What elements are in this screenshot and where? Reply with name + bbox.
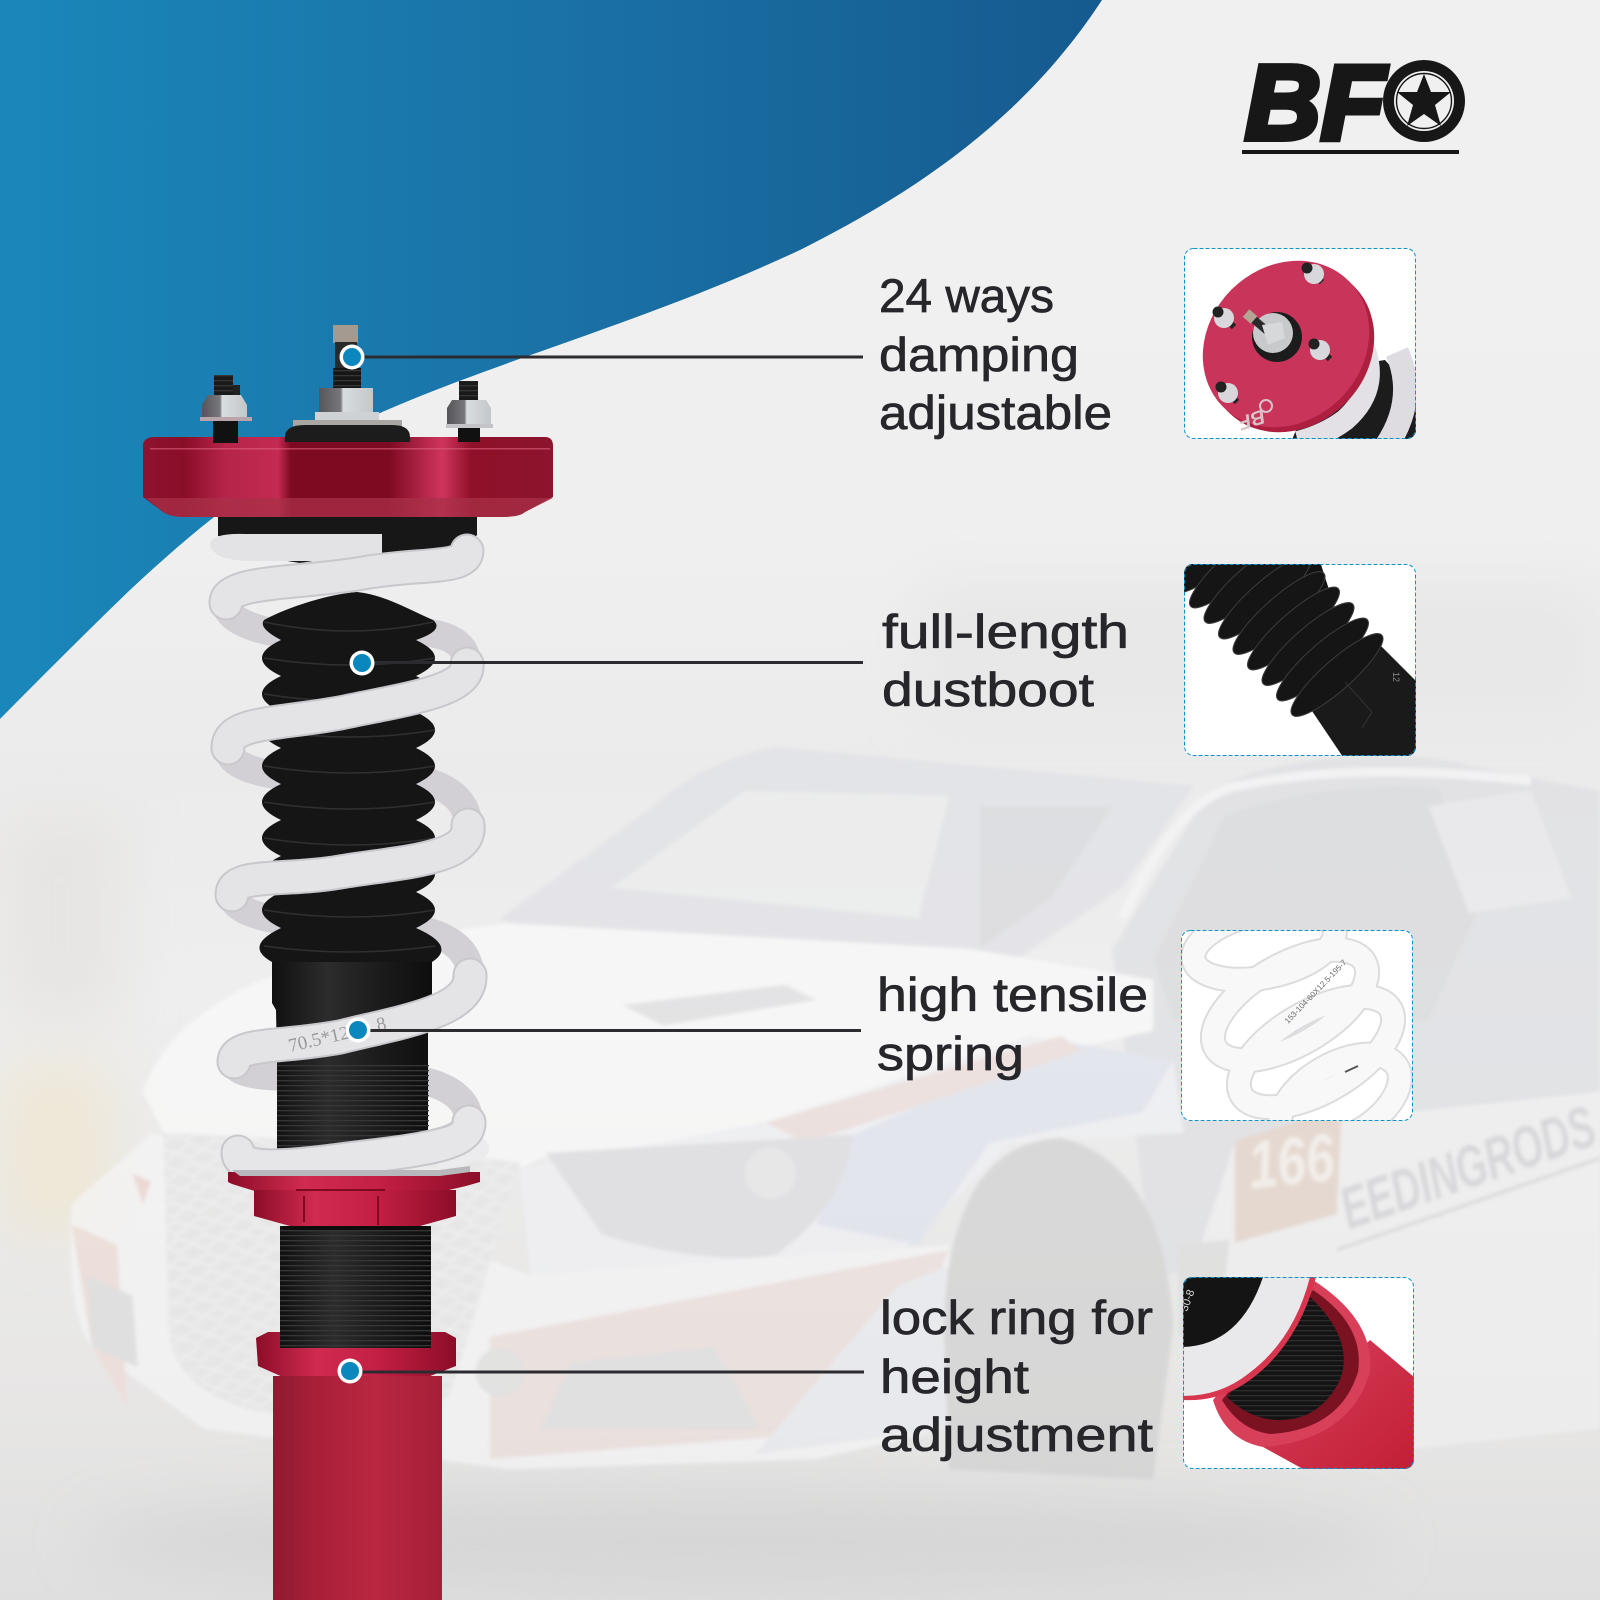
photo card: dustboot: 12 (1391, 672, 1401, 682)
red tube (273, 1376, 442, 1600)
label: full-length dustboot (882, 605, 1129, 716)
spring behind the mount (1292, 344, 1416, 439)
rear spring coils (226, 603, 470, 1122)
number panel (1235, 1107, 1342, 1243)
headlight (546, 1135, 852, 1258)
photo card: spring: 153-104-60X12.5-195-7 (1283, 958, 1349, 1025)
windshield (500, 747, 1194, 964)
label: 24 ways damping adjustable: damping (879, 328, 1079, 381)
blue and red stripes (520, 1036, 1184, 1276)
hood (143, 923, 1153, 1168)
background: faded race car photo: 166 (1245, 1120, 1338, 1204)
top plate (143, 437, 553, 517)
photo card: dustboot (1184, 564, 1416, 756)
label: lock ring for height adjustment: adjustment (880, 1408, 1153, 1461)
left mounting bolt (200, 375, 252, 443)
photo card: lock ring (1179, 1277, 1414, 1469)
coilover shock absorber: 8 (374, 1013, 388, 1036)
label: full-length dustboot: full-length (882, 605, 1129, 658)
label: high tensile spring (877, 968, 1148, 1080)
leader line: dustboot (362, 661, 863, 664)
label: 24 ways damping adjustable (879, 269, 1112, 439)
top flat coil (210, 534, 382, 561)
dust boot (259, 592, 441, 962)
label: lock ring for height adjustment: height (880, 1350, 1029, 1403)
black body and threads (272, 958, 432, 1150)
center stud (1252, 312, 1302, 362)
upper black seat (218, 517, 477, 565)
photo card: lock ring: 30-8 (1179, 1288, 1197, 1313)
label: high tensile spring: high tensile (877, 968, 1148, 1021)
label: lock ring for height adjustment: lock ring for (880, 1291, 1153, 1344)
bumper (71, 1133, 949, 1469)
spring perch (228, 1172, 480, 1192)
lock nut (254, 1190, 456, 1226)
label: lock ring for height adjustment (880, 1291, 1153, 1461)
logo: BFO: BF (1245, 44, 1388, 162)
spring marking: 70.5*12- (286, 1021, 357, 1057)
height lock ring (256, 1332, 456, 1378)
rear body (1112, 756, 1600, 1276)
wheel (944, 1138, 1173, 1480)
marker: dustboot (350, 650, 374, 676)
center stud and nut (285, 325, 410, 442)
leader line: spring (358, 1029, 861, 1032)
lowest coil (445, 1148, 478, 1158)
leader line: lock ring (350, 1370, 864, 1374)
label: 24 ways damping adjustable: adjustable (879, 386, 1112, 439)
blue corner shape (0, 0, 1102, 719)
marker: spring (346, 1018, 370, 1042)
label: high tensile spring: spring (877, 1027, 1024, 1080)
right mounting bolt (446, 381, 493, 442)
photo card: spring (1181, 930, 1413, 1121)
front spring coils: edge shade (226, 551, 470, 1062)
coilover shock absorber (143, 325, 553, 1600)
marker: lock ring (338, 1358, 362, 1384)
mount bolts (1212, 262, 1330, 403)
engraved logo on plate: BF (1235, 404, 1268, 434)
label: full-length dustboot: dustboot (882, 663, 1094, 716)
logo: BFO (1242, 44, 1465, 162)
photo card: top mount (1184, 248, 1416, 439)
thread on body (283, 1226, 428, 1230)
label: 24 ways damping adjustable: 24 ways (879, 269, 1054, 322)
threaded lower body (280, 1226, 431, 1356)
front spring coils: body (226, 551, 470, 1062)
background: faded race car photo (0, 582, 1600, 1592)
grill (163, 1133, 520, 1418)
marker: damping (340, 344, 364, 370)
leader line: damping (352, 356, 863, 358)
